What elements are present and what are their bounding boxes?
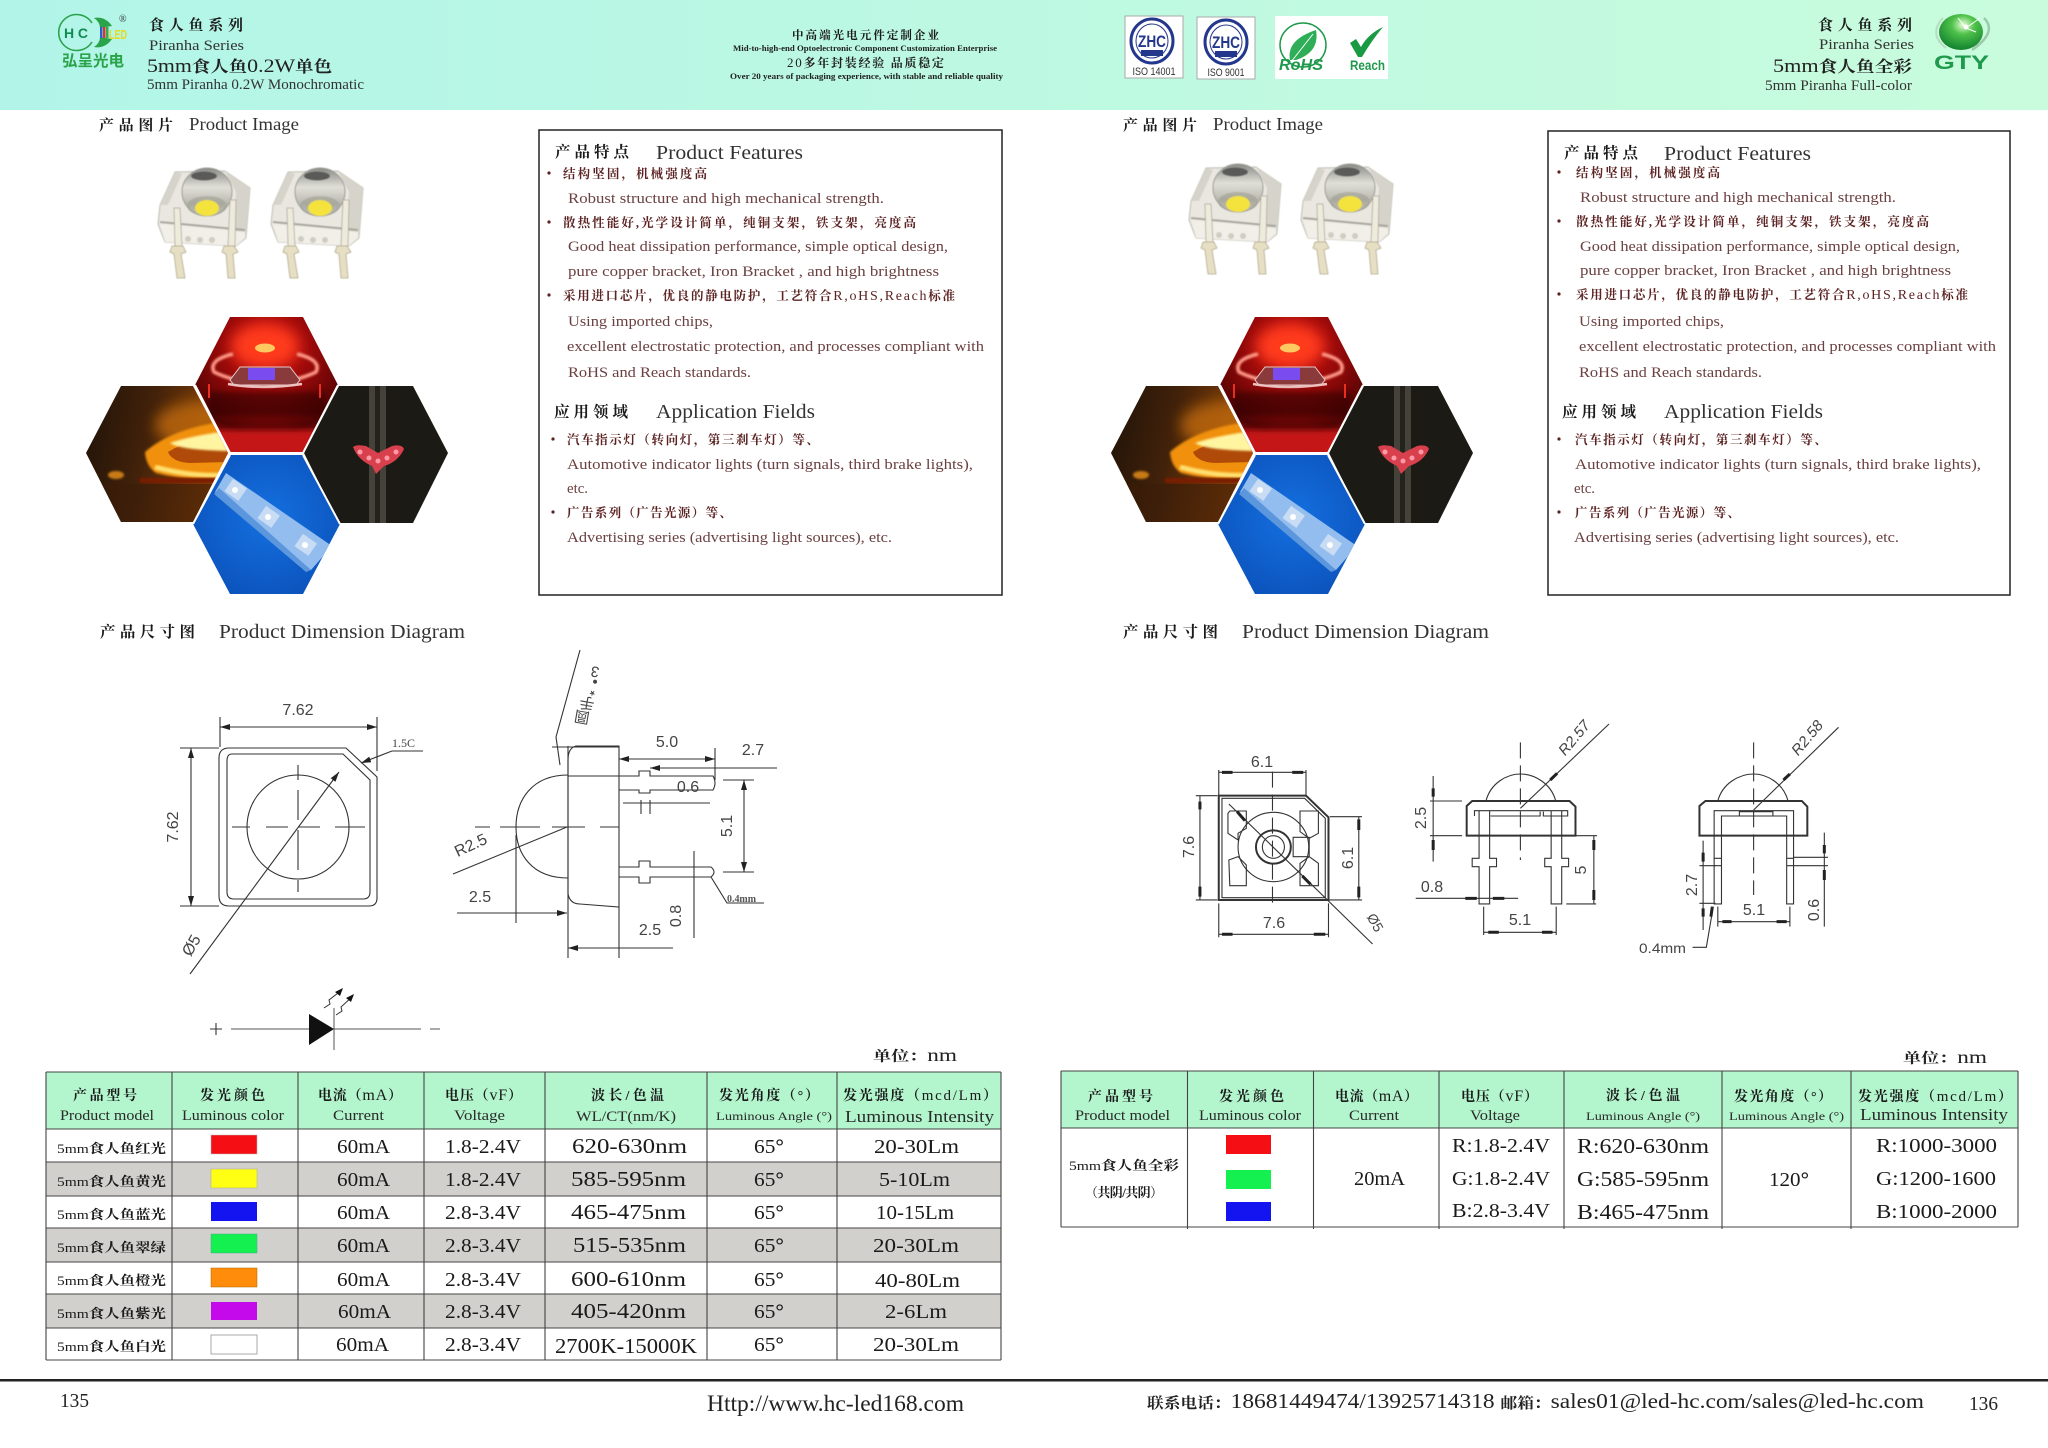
row: red: 20-30Lm [874,1136,960,1158]
unit label right: 单位： nm [1903,1047,1987,1067]
dimension drawing: left side view: 5.1 [719,815,736,837]
dimension drawing: right side view: 2.7 [1684,874,1701,896]
table header: 电压（vF） [445,1087,522,1104]
application list right: Advertising series (advertising light sources), etc. [1574,530,1899,546]
row: yellow: 65° [754,1169,784,1191]
heading: dimension diagram right: 产品尺寸图 [1123,622,1218,641]
row: orange [57,1267,961,1292]
dimension drawing: right top view: 6.1 [1340,847,1357,869]
header band [0,0,2048,110]
unit label left: 单位： nm [873,1045,957,1065]
left header text: 5mm Piranha 0.2W Monochromatic [147,77,364,93]
row: purple: 5mm 食人鱼紫光 [57,1306,166,1321]
features list right: RoHS and Reach standards. [1579,365,1762,381]
table header right: 发光角度（°） [1734,1088,1832,1105]
right header text: Piranha Series [1819,37,1914,53]
row: white: 2700K-15000K [555,1334,697,1358]
dimension drawing: right middle view [1413,717,1609,935]
application photo hexagons left [80,310,455,600]
table header: Luminous Angle (°) [716,1109,832,1123]
left header text: 5mm 食人鱼 0.2W 单色 [147,56,332,77]
dimension drawing: right top view: 7.6 [1181,836,1198,858]
dimension drawing: right top view [1181,754,1387,944]
dimension drawing: right middle view: R2.57 [1555,717,1594,759]
logo: HC LED: ® [119,14,127,25]
row: orange: 2.8-3.4V [445,1269,522,1291]
website: Http://www.hc-led168.com [707,1391,964,1416]
table header: 发光强度（mcd/Lm） [843,1087,997,1104]
row: red: 5mm 食人鱼红光 [57,1141,166,1156]
row: blue: 5mm 食人鱼蓝光 [57,1207,166,1222]
application list: 广告系列（广告光源）等、 [567,505,732,520]
logo: HC LED: LED [109,27,127,42]
application photo hexagons right [1105,310,1480,600]
draft angle note: • [591,672,599,690]
dimension drawing: left side view: 2.7 [742,742,764,759]
features list right: 散热性能好,光学设计简单，纯铜支架，铁支架，亮度高 [1576,214,1929,229]
application list right: 汽车指示灯（转向灯，第三刹车灯）等、 [1575,432,1827,447]
heading: Product Image right: Product Image [1213,114,1323,134]
dimension drawing: left front view [165,702,423,974]
row: emerald green [57,1233,960,1257]
table header right: Voltage [1470,1108,1520,1124]
table header right: Luminous Angle (°) [1586,1109,1700,1123]
row: blue: 2.8-3.4V [445,1202,522,1224]
row: red: 65° [754,1136,784,1158]
heading: Product Image left [99,114,299,134]
table header: 产品型号 [73,1087,137,1104]
icon: ISO 9001 seal: ZHC [1212,33,1240,52]
left header text: Piranha Series [149,38,244,54]
center slogan: 20多年封装经验 品质稳定 [787,55,944,70]
icon: RoHS and Reach marks: Reach [1350,57,1385,73]
cell: wavelength: R:620-630nm [1577,1134,1709,1158]
dimension drawing: right side view: 0.6 [1806,899,1823,921]
features heading: 产品特点 [555,142,630,161]
row: red: 1.8-2.4V [445,1136,522,1158]
draft angle note [573,662,601,729]
features list right: excellent electrostatic protection, and processes compliant with [1579,339,1997,355]
dimension drawing: left front view: 7.62 [165,811,182,843]
row: white: 5mm 食人鱼白光 [57,1339,166,1354]
dimension drawing: right top view: 7.6 [1263,915,1285,932]
features list: RoHS and Reach standards. [568,365,751,381]
contact line: 联系电话： 18681449474/13925714318 邮箱：sales01@led-hc.com/sales@led-hc.com [1147,1389,1924,1413]
cell: voltage: R:1.8-2.4V [1452,1135,1551,1157]
cell: model [1069,1158,1179,1200]
row: emerald green: 65° [754,1235,784,1257]
dimension drawing: right middle view: 5.1 [1509,912,1531,929]
row: orange: 40-80Lm [875,1270,961,1292]
features heading right: Product Features [1664,143,1811,165]
dimension drawing: right middle view: 5 [1573,865,1590,874]
cell: wavelength: B:465-475nm [1577,1200,1709,1224]
features list [547,166,985,381]
grey row stripes [46,1162,1001,1328]
dimension drawing: right top view: 6.1 [1251,754,1273,771]
features heading right [1564,143,1811,165]
row: orange: 60mA [337,1269,391,1291]
features list: Using imported chips, [568,314,713,330]
heading: Product Image right: 产品图片 [1123,116,1197,134]
table header right: 发光强度（mcd/Lm） [1858,1088,2012,1105]
heading: dimension diagram left: Product Dimension Diagram [219,621,465,643]
features list: 散热性能好,光学设计简单，纯铜支架，铁支架，亮度高 [563,215,916,230]
row: white: 60mA [336,1334,390,1356]
dimension drawing: right side view: 5.1 [1743,902,1765,919]
center slogan: Mid-to-high-end Optoelectronic Component Customization Enterprise [733,43,997,53]
dimension drawing: left front view: Ø5 [179,932,205,959]
table header right: Product model [1075,1108,1170,1124]
draft angle note: 3 [590,662,601,680]
table header right: 电压（vF） [1461,1088,1538,1105]
table: monochromatic specs [46,1072,1001,1360]
features list right: Good heat dissipation performance, simple optical design, [1580,239,1960,255]
heading: dimension diagram right [1123,621,1489,643]
logo: GTY globe [1934,14,1989,74]
icon: RoHS and Reach marks: RoHS [1279,57,1323,74]
row: emerald green: 60mA [337,1235,391,1257]
row: white: 2.8-3.4V [445,1334,522,1356]
right header text: 食人鱼系列 [1818,16,1912,34]
cell: intensity: R:1000-3000 [1876,1135,1997,1157]
cell: color swatches [1226,1135,1271,1221]
row: blue: 465-475nm [571,1200,686,1224]
panel: product features right [1548,131,2010,595]
icon: LED circuit symbol [210,988,440,1050]
dimension drawing: left side view: 5.0 [656,734,678,751]
center slogan: Over 20 years of packaging experience, with stable and reliable quality [730,71,1004,81]
features list: 采用进口芯片，优良的静电防护，工艺符合R,oHS,Reach标准 [563,288,955,304]
application heading right: 应用领域 [1562,402,1636,421]
right header text [1765,16,1914,94]
features list: Good heat dissipation performance, simple optical design, [568,239,948,255]
row: purple: 405-420nm [571,1299,686,1323]
application list: Advertising series (advertising light sources), etc. [567,530,892,546]
application heading: Application Fields [656,401,815,423]
application list right [1557,432,1981,546]
dimension drawing: right middle view: 2.5 [1413,807,1430,829]
cell: model: （共阴/共阴） [1085,1185,1163,1200]
cell: voltage [1452,1135,1551,1222]
table header: Voltage [454,1108,505,1124]
table header: Luminous Intensity [845,1107,995,1126]
features list: 结构坚固，机械强度高 [563,166,707,181]
features list: excellent electrostatic protection, and processes compliant with [567,339,985,355]
draft angle note: 圆 [573,706,591,729]
features heading [555,142,803,164]
center slogan [730,28,1004,81]
table header right [1061,1071,2018,1128]
features list: pure copper bracket, Iron Bracket , and high brightness [568,264,939,280]
dimension drawing: left side view: R2.5 [452,831,490,861]
heading: Product Image left: 产品图片 [99,116,173,134]
features list right: Using imported chips, [1579,314,1724,330]
right header text: 5mm Piranha Full-color [1765,78,1912,94]
application list: Automotive indicator lights (turn signals, third brake lights), [567,457,973,473]
table header right: Luminous color [1199,1108,1301,1124]
row: purple: 65° [754,1301,784,1323]
row: yellow: 1.8-2.4V [445,1169,522,1191]
table header right: Luminous Angle (°) [1729,1109,1844,1123]
icon: ISO 14001 seal: ISO 14001 [1132,66,1176,78]
row: yellow [57,1167,950,1191]
application list right: Automotive indicator lights (turn signals, third brake lights), [1575,457,1981,473]
right header text: 5mm 食人鱼全彩 [1773,56,1912,77]
heading: dimension diagram left [100,621,465,643]
table header: 发光颜色 [200,1087,265,1104]
table header: Current [333,1108,385,1124]
row: emerald green: 515-535nm [573,1233,686,1257]
row: emerald green: 5mm 食人鱼翠绿 [57,1240,166,1255]
cell: intensity: B:1000-2000 [1876,1201,1997,1223]
application list [551,432,973,546]
logo: HC LED [59,14,127,71]
cell: voltage: G:1.8-2.4V [1452,1168,1551,1190]
table header: WL/CT(nm/K) [576,1109,676,1125]
dimension drawing: left side view: 0.8 [668,905,685,927]
dimension drawing: left front view: 1.5C [392,736,415,750]
dimension drawing: left side view [452,650,777,958]
dimension drawing: right top view: Ø5 [1364,910,1387,935]
row: white: 20-30Lm [873,1334,960,1356]
page number right: 136 [1969,1393,1998,1415]
cell: model: 5mm 食人鱼全彩 [1069,1158,1179,1173]
dimension drawing: right side view: R2.58 [1788,717,1827,759]
draft angle note: * [588,678,598,700]
features list: Robust structure and high mechanical strength. [568,191,884,207]
table header right: 电流（mA） [1335,1088,1418,1105]
dimension drawing: left side view: 0.6 [677,779,699,796]
features list right [1557,165,1997,381]
row: purple [57,1299,948,1323]
footer [0,1379,2048,1416]
icon: ISO 9001 seal: ISO 9001 [1208,67,1244,79]
row: white: 65° [754,1334,784,1356]
application heading [554,401,815,423]
cell: wavelength [1577,1134,1709,1224]
dimension drawing: left side view: 0.4mm [727,894,757,905]
heading: Product Image left: Product Image [189,114,299,134]
left header text: 食人鱼系列 [149,16,243,34]
icon: ISO 14001 seal [1125,16,1183,78]
icon: ISO 9001 seal [1197,17,1255,79]
table header right: Luminous Intensity [1860,1105,2009,1124]
center slogan: 中高端光电元件定制企业 [792,28,940,42]
row: yellow: 5mm 食人鱼黄光 [57,1174,166,1189]
table header: 电流（mA） [318,1087,402,1104]
row: red: 620-630nm [572,1134,687,1158]
table header: 波长/色温 [591,1087,664,1104]
cell: intensity: G:1200-1600 [1876,1168,1996,1190]
application heading: 应用领域 [554,402,628,421]
row: emerald green: 20-30Lm [873,1235,960,1257]
row: blue: 60mA [337,1202,391,1224]
panel: product features left [539,130,1002,595]
features list right: pure copper bracket, Iron Bracket , and high brightness [1580,263,1951,279]
heading: dimension diagram left: 产品尺寸图 [100,622,195,641]
application list right: etc. [1574,481,1595,497]
row: yellow: 60mA [337,1169,391,1191]
table header [46,1072,1001,1129]
dimension drawing: right side view: 0.4mm [1639,940,1686,956]
left header text [147,16,364,93]
row: yellow: 585-595nm [571,1167,686,1191]
dimension drawing: right side view [1639,717,1839,956]
cell: current: 20mA [1354,1168,1406,1190]
row: yellow: 5-10Lm [879,1169,950,1191]
logo: GTY globe: GTY [1934,53,1989,74]
application list: 汽车指示灯（转向灯，第三刹车灯）等、 [567,432,819,447]
row: orange: 600-610nm [571,1267,686,1291]
table header right: 波长/色温 [1606,1087,1680,1104]
application heading right [1562,401,1823,423]
table header: 发光角度（°） [719,1087,819,1104]
cell: wavelength: G:585-595nm [1577,1167,1709,1191]
row: emerald green: 2.8-3.4V [445,1235,522,1257]
cell: voltage: B:2.8-3.4V [1452,1200,1551,1222]
row: red: 60mA [337,1136,391,1158]
dimension drawing: left side view: 2.5 [639,922,661,939]
application list right: 广告系列（广告光源）等、 [1575,505,1740,520]
logo: HC LED: 弘呈光电 [62,49,124,71]
icon: RoHS and Reach marks [1275,16,1388,79]
table header: Product model [60,1108,154,1124]
table: full-color specs [1061,1071,2018,1229]
cell: intensity [1876,1135,1997,1223]
features heading right: 产品特点 [1564,143,1639,162]
row: blue: 10-15Lm [876,1202,954,1224]
row: white [57,1334,960,1358]
features list right: 结构坚固，机械强度高 [1576,165,1720,180]
row: orange: 65° [754,1269,784,1291]
row: purple: 2-6Lm [885,1301,948,1323]
table header right: 发光颜色 [1219,1088,1284,1105]
row: red [57,1134,960,1158]
dimension drawing: left front view: 7.62 [282,702,314,719]
row: purple: 60mA [338,1301,392,1323]
features heading: Product Features [656,142,803,164]
heading: Product Image right [1123,114,1323,134]
heading: dimension diagram right: Product Dimension Diagram [1242,621,1489,643]
table header: Luminous color [182,1108,284,1124]
dimension drawing: left side view: 2.5 [469,889,491,906]
table header right: 产品型号 [1088,1088,1153,1105]
row: blue [57,1200,954,1224]
row: purple: 2.8-3.4V [445,1301,522,1323]
features list right: Robust structure and high mechanical strength. [1580,190,1896,206]
page number left: 135 [60,1390,89,1412]
cell: angle: 120° [1769,1169,1809,1191]
application heading right: Application Fields [1664,401,1823,423]
photo: LED pair left [158,168,363,278]
features list right: 采用进口芯片，优良的静电防护，工艺符合R,oHS,Reach标准 [1576,287,1968,303]
draft angle note: 手 [578,692,596,715]
row: orange: 5mm 食人鱼橙光 [57,1273,166,1288]
application list: etc. [567,481,588,497]
row: blue: 65° [754,1202,784,1224]
table header right: Current [1349,1108,1400,1124]
dimension drawing: right middle view: 0.8 [1421,879,1443,896]
photo: LED pair right [1189,164,1393,274]
icon: ISO 14001 seal: ZHC [1138,32,1166,51]
logo: HC LED: HC [64,25,88,41]
